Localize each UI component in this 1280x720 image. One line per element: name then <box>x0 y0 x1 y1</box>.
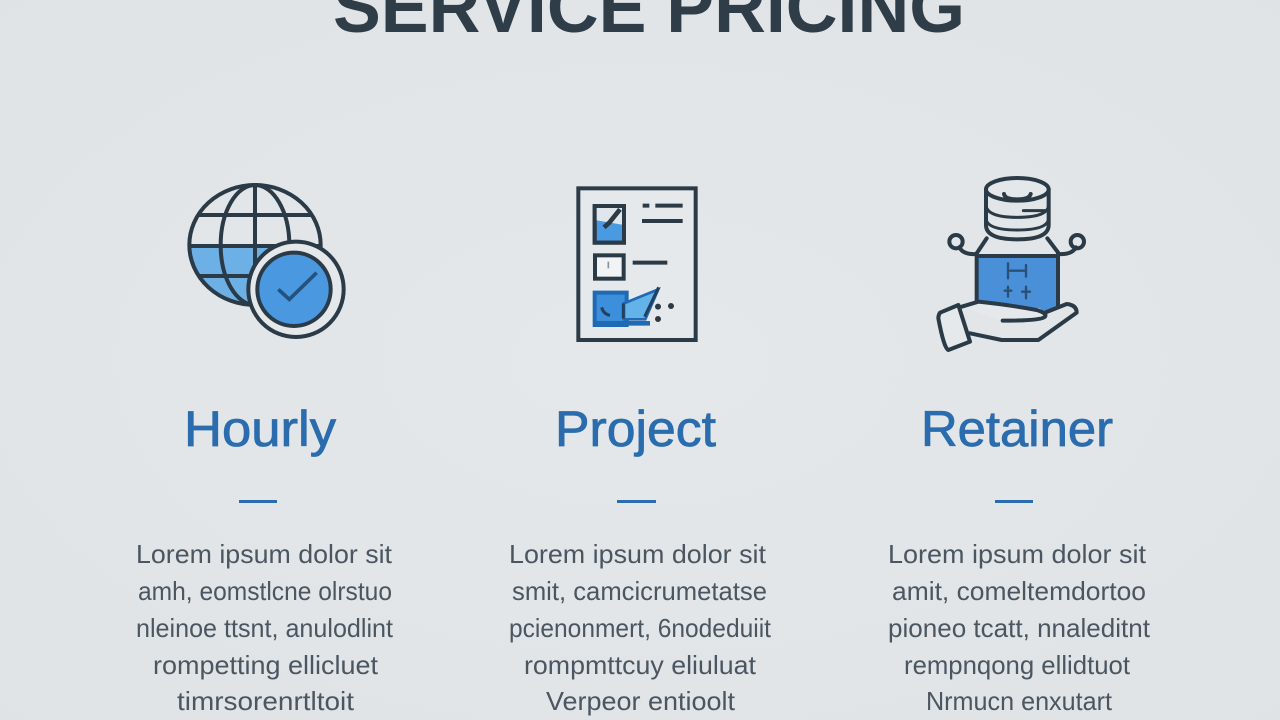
text block: project: Lorem ipsum dolor sit <box>509 539 767 569</box>
icon: checklist <box>578 188 696 340</box>
text block: retainer: Lorem ipsum dolor sit <box>888 539 1147 569</box>
text block: hourly <box>136 539 394 716</box>
text block: hourly: timrsorenrtltoit <box>177 686 355 716</box>
heading: Project: Project <box>555 401 716 457</box>
text block: retainer: amit, comeltemdortoo <box>892 576 1146 606</box>
text block: hourly: rompetting ellicluet <box>153 650 379 680</box>
heading: Retainer: Retainer <box>921 401 1113 457</box>
text block: retainer: pioneo tcatt, nnaleditnt <box>888 613 1151 643</box>
divider: retainer <box>995 500 1033 503</box>
text block: hourly: Lorem ipsum dolor sit <box>136 539 393 569</box>
text block: project: rompmttcuy eliuluat <box>524 650 757 680</box>
divider: hourly <box>239 500 277 503</box>
panel: retainer <box>888 178 1151 716</box>
text block: hourly: nleinoe ttsnt, anulodlint <box>136 613 394 643</box>
heading: Hourly: Hourly <box>184 401 336 457</box>
text block: project: pcienonmert, 6nodeduiit <box>509 613 772 643</box>
text block: project: smit, camcicrumetatse <box>512 576 767 606</box>
text block: retainer <box>888 539 1151 716</box>
icon: hand holding database jar <box>938 178 1084 350</box>
text block: retainer: Nrmucn enxutart <box>926 686 1113 716</box>
text block: retainer: rempnqong ellidtuot <box>904 650 1131 680</box>
text block: project <box>509 539 772 716</box>
icon: dots <box>655 303 674 322</box>
text block: hourly: amh, eomstlcne olrstuo <box>138 576 392 606</box>
divider: project <box>617 500 656 503</box>
text block: project: Verpeor entioolt <box>546 686 736 716</box>
panel: project <box>509 188 772 716</box>
panel: hourly <box>136 185 394 716</box>
icon: globe with check badge <box>189 185 344 337</box>
